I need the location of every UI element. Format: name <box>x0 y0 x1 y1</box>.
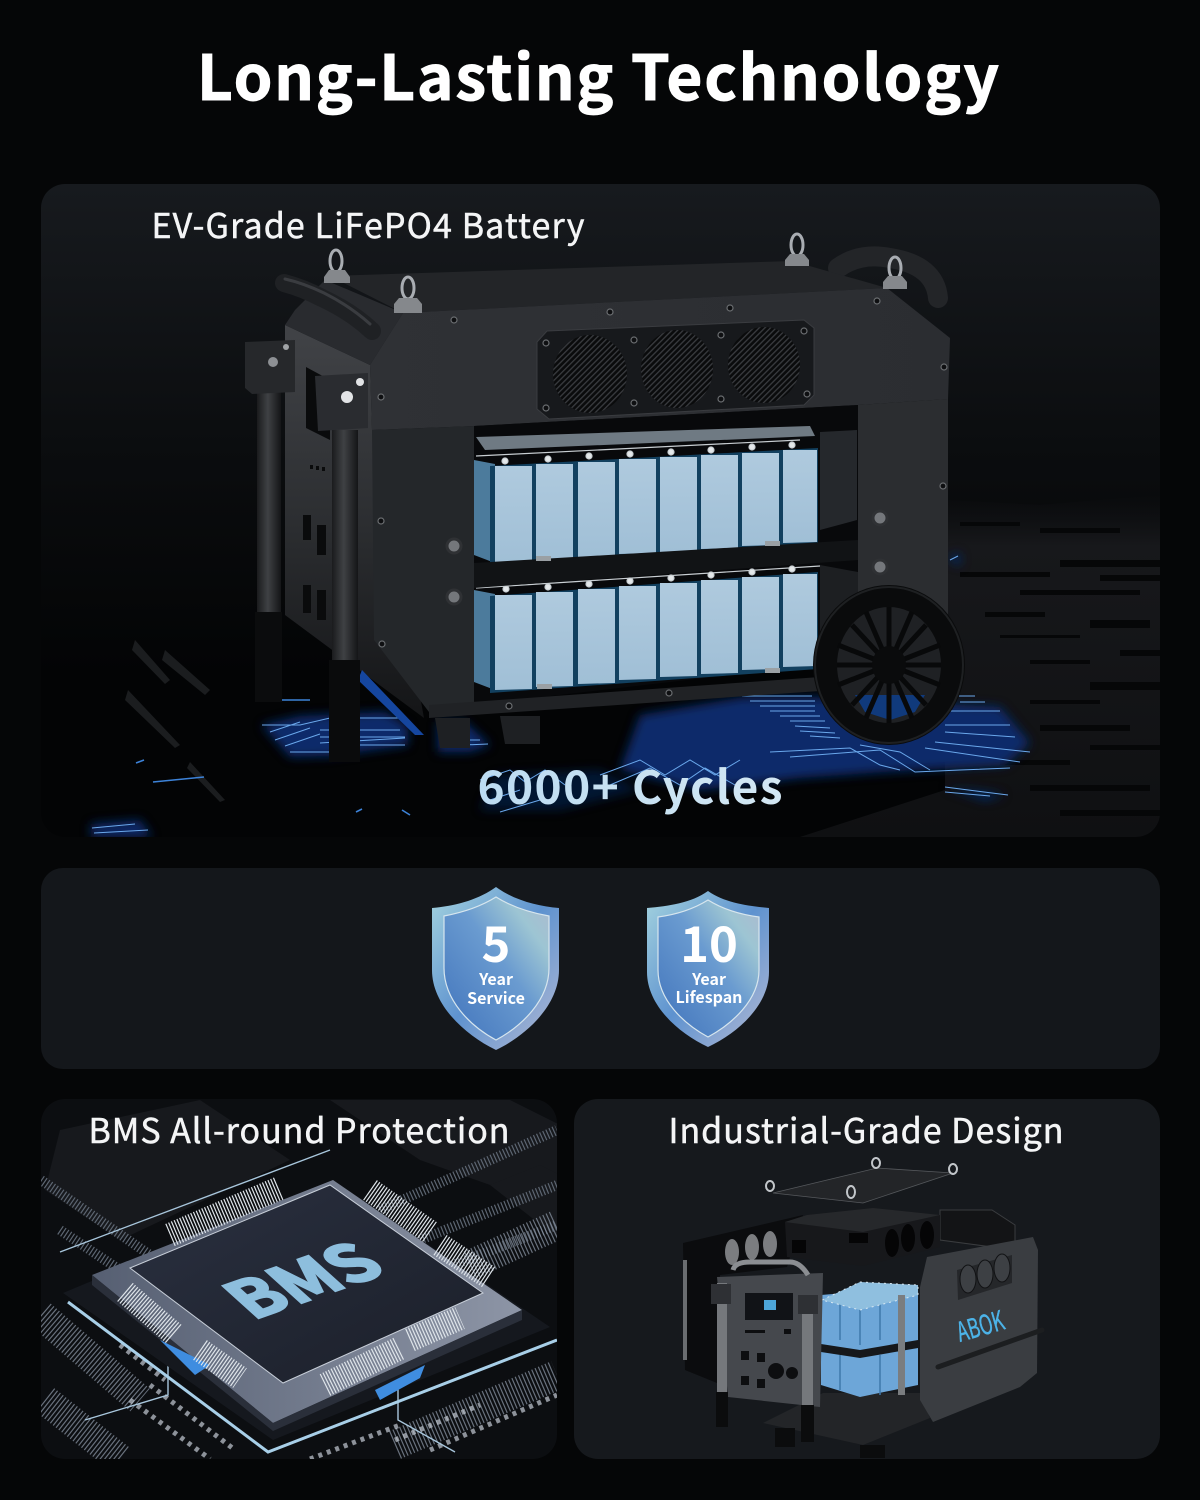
battery stack shelf <box>821 1340 918 1358</box>
bottom row dark slots <box>490 572 818 693</box>
top plate <box>773 1168 953 1203</box>
inner box holes <box>792 1221 934 1257</box>
top handle <box>733 1262 808 1275</box>
front small knob <box>356 378 364 386</box>
front unit <box>717 1273 823 1407</box>
battery cell lines <box>840 1300 880 1395</box>
pcb dots <box>120 1345 557 1459</box>
back handle <box>940 1210 1015 1250</box>
title: Long-Lasting Technology <box>197 28 999 118</box>
corner bevel <box>285 280 403 365</box>
badge: 5 year service: Year <box>478 966 513 990</box>
badge: 10 year lifespan: Year <box>691 966 726 990</box>
left rear bracket <box>245 340 295 394</box>
dark ics in background <box>45 1100 560 1240</box>
feet <box>435 716 540 748</box>
chip top face <box>130 1185 483 1383</box>
left rear small knob <box>283 344 289 350</box>
front bracket <box>315 373 368 431</box>
panel heading: EV-Grade: EV-Grade LiFePO4 Battery <box>152 199 585 248</box>
top battery row <box>495 450 817 563</box>
pole grips <box>716 1392 814 1442</box>
fine circuit fields <box>41 1225 557 1459</box>
fans <box>553 327 800 413</box>
circuit lines <box>92 556 1030 833</box>
pin combs <box>125 1188 490 1385</box>
grey bracket lower <box>820 565 858 631</box>
glowing board edge <box>68 1302 557 1452</box>
badge: 10 year lifespan: Lifespan <box>676 984 742 1008</box>
badge: 5 year service: Service <box>467 985 525 1009</box>
chip lower base <box>63 1180 550 1440</box>
right rear handle <box>838 256 938 298</box>
circuit traces background <box>41 1130 557 1310</box>
front left handle highlight <box>285 279 370 324</box>
6000+ Cycles: 6000+ Cycles <box>478 752 782 818</box>
eye bolt bases <box>324 254 907 313</box>
left floor slabs <box>125 640 225 802</box>
BMS chip text: BMS <box>197 1222 403 1332</box>
navy circuit zones <box>91 553 1030 837</box>
floor slabs right <box>800 495 1160 837</box>
wheel spokes <box>837 607 941 723</box>
blue edge behind body <box>358 670 424 735</box>
inner box <box>785 1208 940 1266</box>
right glass panel <box>858 399 948 614</box>
wheel <box>813 585 965 745</box>
left side panel <box>683 1215 803 1383</box>
tray feet <box>775 1428 885 1458</box>
screen <box>745 1293 793 1320</box>
wheel blue floor <box>855 695 925 720</box>
front pole <box>332 430 358 660</box>
panel: BMS protection <box>41 1099 560 1459</box>
right fan plate <box>957 1255 1012 1300</box>
bottom battery row <box>495 574 817 690</box>
badge: 5 year service <box>432 887 559 1050</box>
dark interior <box>476 405 858 426</box>
cell terminals <box>822 1282 918 1310</box>
front poles <box>717 1283 813 1442</box>
battery unit illustration <box>245 234 965 762</box>
front left handle <box>284 283 372 331</box>
panel: warranty badges <box>41 868 1160 1069</box>
battery upright strap <box>898 1295 905 1395</box>
chip base plate <box>92 1180 522 1423</box>
screws <box>378 298 947 709</box>
left rear pole grip <box>255 612 282 702</box>
battery stack <box>821 1287 918 1397</box>
outlet ports on side <box>303 367 330 620</box>
highlight lines <box>60 1150 455 1452</box>
right panel fans <box>960 1254 1010 1293</box>
left panel strip <box>683 1260 687 1360</box>
top row dark slots <box>490 448 818 566</box>
battery tray top <box>476 426 815 450</box>
left blue accents <box>136 700 410 815</box>
shelf <box>474 540 858 588</box>
ABOK logo: ABOK <box>951 1299 1009 1350</box>
upper shell <box>370 288 950 430</box>
side wall <box>285 325 424 718</box>
brackets <box>711 1284 818 1314</box>
left rear pole <box>257 393 281 612</box>
fan plate <box>537 320 814 419</box>
left panel fan holes <box>725 1231 777 1265</box>
side rod <box>938 1330 1042 1367</box>
chip base lower edge <box>92 1275 522 1431</box>
wheel hub <box>872 646 906 684</box>
badge: 10 year lifespan: 10 <box>680 906 738 977</box>
right side panel <box>920 1237 1038 1422</box>
blue battery sides <box>474 460 495 563</box>
terminals and bus bars <box>476 440 820 592</box>
blue glow <box>160 1340 425 1400</box>
grey bracket inside <box>820 430 857 530</box>
bottom tray <box>763 1393 930 1445</box>
floor gaps right <box>960 522 1160 816</box>
front knob <box>341 391 353 403</box>
exploded view illustration <box>683 1158 1042 1458</box>
top plate eye bolts <box>766 1158 957 1198</box>
left glass panel <box>372 426 474 712</box>
outlets <box>741 1329 798 1388</box>
panel: EV-grade LiFePO4 battery <box>41 184 1160 837</box>
front pole grip <box>329 660 360 762</box>
panel heading: industrial: Industrial-Grade Design <box>668 1104 1064 1153</box>
knobs <box>447 511 887 604</box>
lower frame <box>429 677 820 718</box>
inner box top <box>785 1208 940 1232</box>
screen colour <box>764 1300 776 1310</box>
eye bolts <box>330 234 901 299</box>
badge: 5 year service: 5 <box>482 906 510 977</box>
blue battery sides lower <box>474 590 495 690</box>
left rear knob <box>268 357 278 367</box>
badge: 10 year lifespan <box>647 891 769 1047</box>
battery clips <box>536 541 780 689</box>
panel: industrial-grade design <box>574 1099 1160 1459</box>
panel heading: BMS: BMS All-round Protection <box>88 1104 510 1153</box>
top face <box>330 261 887 313</box>
